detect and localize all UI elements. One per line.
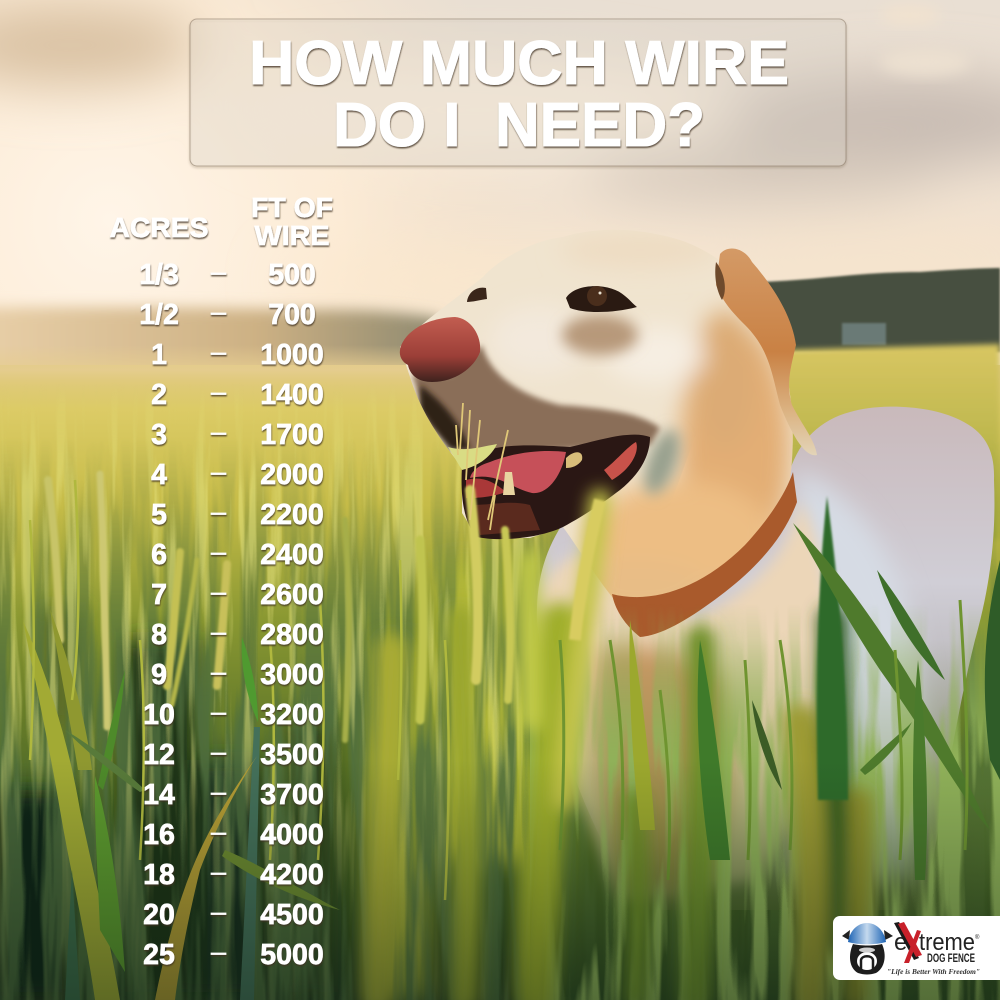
column heading: ft of wire: FT OF	[251, 192, 333, 223]
dog ear	[716, 248, 817, 455]
icon: bulldog with helmet	[842, 923, 893, 974]
table rows: —	[211, 465, 226, 482]
table rows: 14	[143, 779, 175, 811]
table rows: 3	[151, 419, 167, 451]
table rows: 3700	[260, 779, 324, 811]
table rows: —	[211, 745, 226, 762]
dog nose	[400, 317, 480, 382]
table rows: 4500	[260, 899, 324, 931]
table rows: 1/3	[139, 259, 179, 291]
logo wordmark: ®	[975, 934, 980, 941]
table rows: 2400	[260, 539, 324, 571]
logo wordmark: treme	[919, 929, 975, 956]
table rows: 1700	[260, 419, 324, 451]
streak texture of distant stems	[0, 457, 1000, 1000]
table rows: 9	[151, 659, 167, 691]
table rows: 4	[151, 459, 167, 491]
table rows: 25	[143, 939, 175, 971]
table rows: 5	[151, 499, 167, 531]
table rows: —	[211, 385, 226, 402]
table rows	[139, 259, 324, 971]
column heading: ft of wire	[251, 192, 333, 251]
table rows: —	[211, 265, 226, 282]
table rows: —	[211, 425, 226, 442]
logo wordmark	[887, 922, 980, 976]
grass: sharp leaves and stems	[23, 403, 1000, 1000]
title: how much wire do i need: HOW MUCH WIRE	[249, 29, 789, 98]
grass: overlay over dog lower body	[530, 612, 1000, 1000]
title: how much wire do i need	[249, 29, 789, 160]
table rows: —	[211, 945, 226, 962]
table rows: 2200	[260, 499, 324, 531]
table rows: 1/2	[139, 299, 179, 331]
dog body	[537, 407, 994, 910]
table rows: 2600	[260, 579, 324, 611]
table rows: —	[211, 785, 226, 802]
table rows: 3500	[260, 739, 324, 771]
table rows: —	[211, 305, 226, 322]
logo badge	[833, 916, 1000, 980]
table rows: —	[211, 865, 226, 882]
table rows: 20	[143, 899, 175, 931]
dog collar	[612, 472, 797, 637]
table rows: —	[211, 905, 226, 922]
table rows: —	[211, 625, 226, 642]
title panel	[190, 19, 846, 166]
table rows: 3200	[260, 699, 324, 731]
table rows: 4200	[260, 859, 324, 891]
logo wordmark: "Life is Better With Freedom"	[887, 967, 980, 976]
table rows: 500	[268, 259, 316, 291]
table rows: 8	[151, 619, 167, 651]
table rows: 7	[151, 579, 167, 611]
table rows: 2	[151, 379, 167, 411]
dark gaps between stems	[0, 560, 970, 1000]
table rows: 700	[268, 299, 316, 331]
table rows: —	[211, 505, 226, 522]
dog head	[400, 235, 793, 598]
table rows: 1000	[260, 339, 324, 371]
table rows: 1400	[260, 379, 324, 411]
table rows: 18	[143, 859, 175, 891]
table rows: —	[211, 665, 226, 682]
dog muzzle shading	[412, 345, 660, 455]
table rows: 1	[151, 339, 167, 371]
wire table	[110, 192, 333, 971]
table rows: —	[211, 705, 226, 722]
table rows: 2000	[260, 459, 324, 491]
table rows: —	[211, 585, 226, 602]
table rows: 12	[143, 739, 175, 771]
dog eyes	[467, 286, 637, 312]
table rows: 16	[143, 819, 175, 851]
table rows: 2800	[260, 619, 324, 651]
grass: blurred foreground blades	[48, 474, 861, 1000]
table rows: —	[211, 545, 226, 562]
table rows: —	[211, 825, 226, 842]
table rows: 10	[143, 699, 175, 731]
dog	[390, 220, 994, 910]
bottom vignette shade	[0, 760, 1000, 1000]
table rows: 3000	[260, 659, 324, 691]
column heading: ft of wire: WIRE	[254, 220, 330, 251]
column heading: acres: ACRES	[110, 212, 208, 243]
table rows: 5000	[260, 939, 324, 971]
logo wordmark: e	[894, 929, 907, 956]
table rows: 4000	[260, 819, 324, 851]
table rows: 6	[151, 539, 167, 571]
title: how much wire do i need: DO I NEED?	[333, 91, 705, 160]
dog mouth and tongue	[448, 435, 650, 539]
table rows: —	[211, 345, 226, 362]
logo wordmark: DOG FENCE	[927, 951, 975, 965]
